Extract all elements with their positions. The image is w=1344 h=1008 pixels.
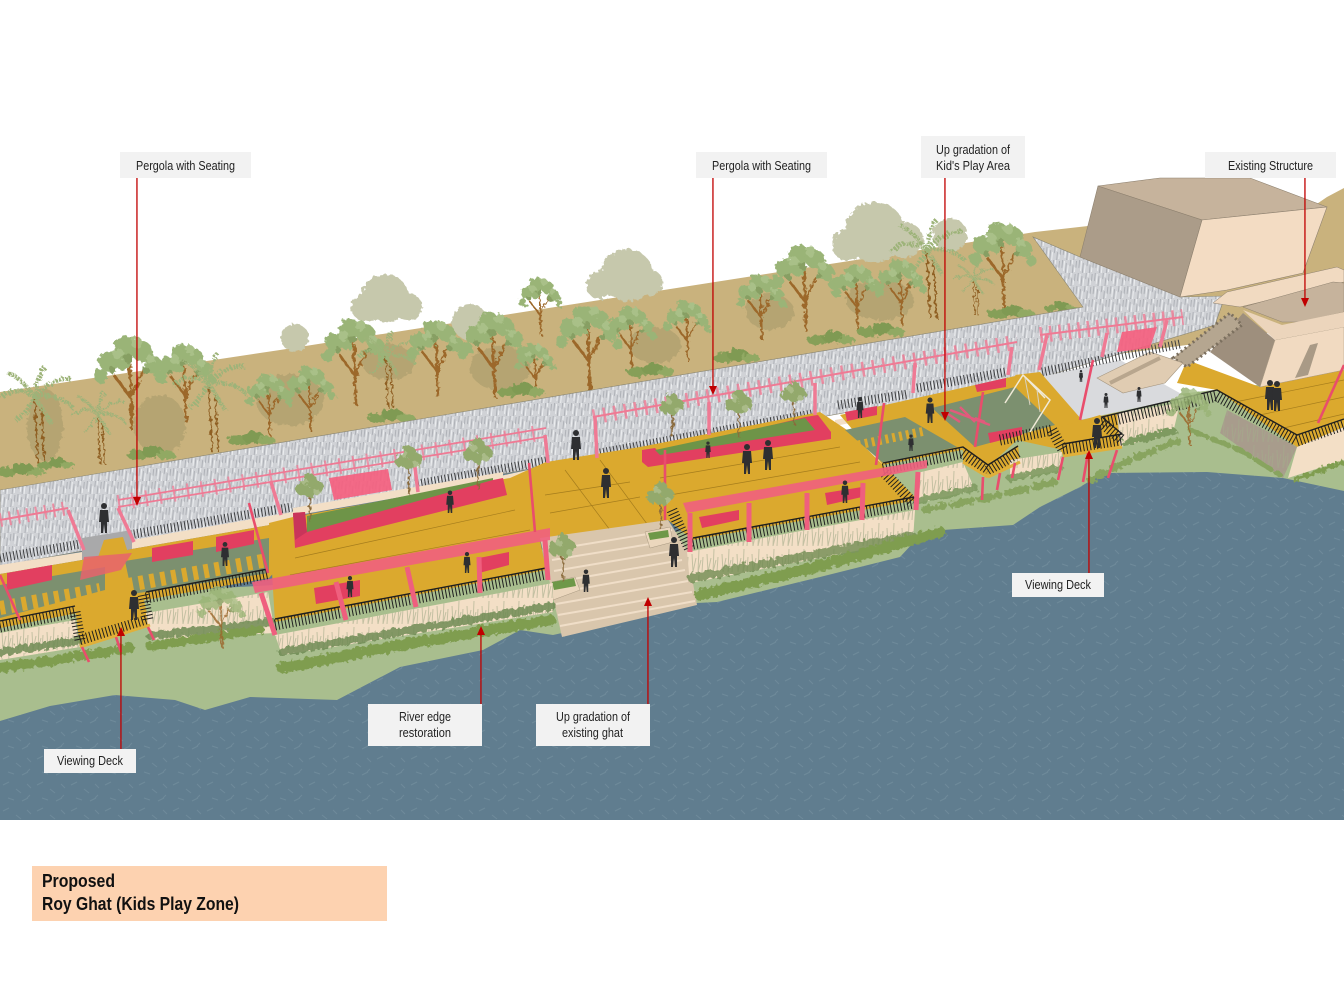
label: Viewing Deck (right) — [1012, 573, 1104, 597]
red planters — [293, 415, 831, 548]
title box — [32, 866, 387, 921]
kids play ground 2 — [932, 387, 1055, 447]
arrow: Viewing Deck (left) — [117, 627, 125, 749]
pergola centre — [593, 342, 1017, 458]
tree shadows on ground — [27, 280, 914, 461]
river water — [0, 465, 1344, 820]
tan ground behind promenade — [0, 188, 1344, 500]
arrow: Kid's Play Area — [941, 178, 949, 421]
label: Existing Structure: Existing Structure — [1228, 159, 1313, 173]
arrow: Existing Structure — [1301, 178, 1309, 307]
right deck — [1177, 360, 1344, 447]
pergola shade panels — [329, 327, 1157, 500]
label: Up gradation of Kid's Play Area — [921, 136, 1025, 178]
label: Up gradation of existing ghat — [536, 704, 650, 746]
front pink pergola roofs and posts — [252, 460, 927, 635]
left play strip green — [0, 567, 105, 618]
arrow: Pergola with Seating (centre) — [709, 178, 717, 395]
existing structure: lower pavilion — [1097, 267, 1344, 393]
front railings — [0, 390, 1344, 640]
label: Up gradation of existing ghat: Up gradation of — [556, 710, 630, 724]
left deck strip — [0, 521, 293, 628]
grey paved gap at crossing — [82, 530, 132, 560]
kids play ground 1 — [845, 417, 957, 463]
label: Up gradation of Kid's Play Area: Up gradation of — [936, 143, 1010, 157]
riverbank vegetation — [0, 430, 1344, 668]
back railings — [0, 344, 1180, 558]
kids play equipment — [948, 375, 1050, 432]
label: Pergola with Seating (centre) — [696, 152, 827, 178]
ground shrubs — [0, 302, 1078, 477]
cream curb — [0, 412, 875, 574]
title box: Roy Ghat (Kids Play Zone) — [42, 894, 239, 914]
arrow: River edge restoration — [477, 626, 485, 704]
arrow: Viewing Deck (right) — [1085, 450, 1093, 573]
seesaw — [948, 407, 990, 425]
bank trees — [197, 388, 1212, 648]
title box: Proposed — [42, 871, 115, 891]
arrow: existing ghat — [644, 597, 652, 704]
label: River edge restoration: River edge — [399, 710, 451, 724]
ghat steps — [540, 520, 697, 637]
label: Pergola with Seating (centre): Pergola with Seating — [712, 159, 811, 173]
grey background tree silhouettes — [281, 202, 967, 352]
label: Up gradation of existing ghat: existing ghat — [562, 726, 623, 740]
label: Viewing Deck (left): Viewing Deck — [57, 754, 124, 768]
planter trees — [296, 381, 806, 582]
swing set — [1005, 375, 1050, 432]
kids zone right plaza — [1038, 360, 1187, 420]
label: Up gradation of Kid's Play Area: Kid's Play Area — [936, 159, 1010, 173]
green river bank — [0, 380, 1344, 721]
label: Viewing Deck (left) — [44, 749, 136, 773]
plaza-edge walkway — [1015, 372, 1122, 450]
pergola far left — [0, 508, 84, 550]
shade sail — [80, 553, 132, 580]
label: Pergola with Seating (left) — [120, 152, 251, 178]
existing structure: large block — [1080, 178, 1327, 297]
label: River edge restoration: restoration — [399, 726, 451, 740]
bench seating — [7, 378, 1022, 604]
palm trees — [0, 219, 994, 465]
viewing deck floors — [75, 415, 1123, 647]
left planter — [307, 478, 493, 534]
crossing stripes — [0, 560, 268, 608]
tree row — [94, 222, 1037, 436]
right planter — [642, 415, 831, 467]
arrow: Pergola with Seating (left) — [133, 178, 141, 506]
deck support posts and lamp posts — [0, 360, 1344, 662]
pergola far right — [1039, 317, 1183, 370]
pergola left — [118, 428, 548, 542]
river walls with reed planting — [0, 403, 1344, 660]
people silhouettes — [99, 370, 1282, 620]
pergolas — [0, 317, 1183, 550]
background trees — [0, 202, 1078, 477]
pavilion staircase — [1173, 313, 1242, 367]
label: Viewing Deck (right): Viewing Deck — [1025, 578, 1092, 592]
yellow zebra on kids ground — [858, 431, 925, 445]
label: Existing Structure — [1205, 152, 1336, 178]
viewing deck floor edges — [80, 447, 1122, 647]
label: Pergola with Seating (left): Pergola with Seating — [136, 159, 235, 173]
main central deck — [269, 412, 918, 622]
label: River edge restoration — [368, 704, 482, 746]
ramp — [1097, 352, 1183, 393]
paved promenade — [0, 237, 1225, 566]
kids walkway deck — [840, 375, 1063, 467]
